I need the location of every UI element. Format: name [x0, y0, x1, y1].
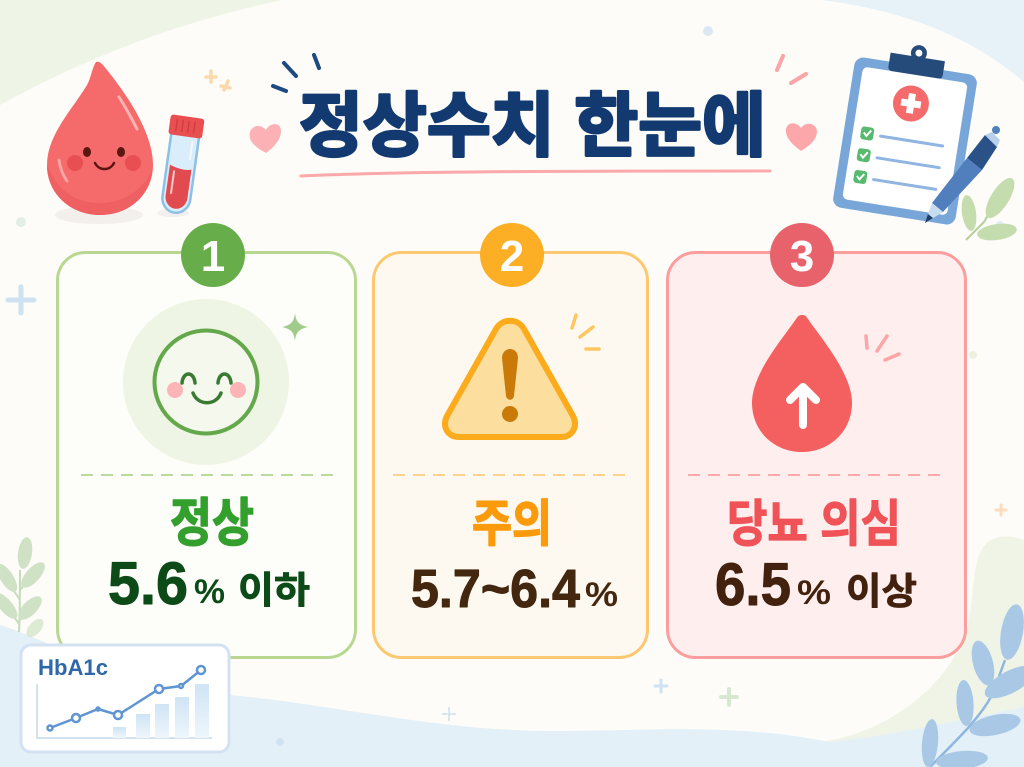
line series [48, 666, 205, 730]
icon: small orange sparkles [206, 71, 230, 90]
badge 3 [770, 223, 834, 287]
icon: pink accent lines [777, 56, 806, 83]
panel: normal card [58, 223, 356, 658]
panel: diabetes suspicion card [668, 223, 966, 658]
badge 3: 3 [790, 232, 814, 281]
value: 5.6% or below [108, 550, 310, 617]
background: top-right blue blob [822, 0, 1024, 82]
status label: normal: 정상 [170, 481, 254, 556]
value: 6.5% or above: 6.5 [715, 551, 791, 618]
title: 정상수치 한눈에 [299, 70, 766, 171]
status label: caution: 주의 [472, 484, 552, 556]
badge 2 [480, 223, 544, 287]
value: 5.6% or below: 이하 [238, 560, 310, 614]
value: 6.5% or above [715, 551, 917, 618]
badge 1 [181, 223, 245, 287]
bars [113, 684, 209, 738]
icon: left leaf sprig [0, 536, 49, 640]
icon: smiley face [123, 299, 289, 465]
background: bottom blue wave [0, 625, 1024, 767]
chart: HbA1c trend card [21, 645, 229, 752]
value: 5.6% or below: 5.6 [108, 550, 188, 617]
icon: clipboard leaf sprig [960, 174, 1020, 243]
title underline [301, 171, 770, 176]
icon: clipboard [832, 35, 1000, 226]
icon: navy accent lines [273, 55, 319, 91]
icon: left heart [250, 124, 281, 153]
icon: warning triangle [445, 321, 575, 437]
icon: test tube [157, 114, 205, 217]
icon: orange accent lines [572, 315, 599, 349]
value: 6.5% or above: % [797, 574, 831, 612]
badge 1: 1 [201, 232, 225, 281]
icon: right bottom leaf sprig [920, 603, 1024, 767]
panel: caution card [374, 223, 648, 658]
background: top-left green blob [0, 0, 282, 105]
icon: blood drop with up arrow [752, 315, 852, 452]
badge 2: 2 [500, 232, 524, 281]
value: 5.7 to 6.4%: % [585, 576, 618, 614]
icon: blood drop mascot [47, 62, 153, 224]
icon: red accent lines [866, 336, 899, 360]
background: lower-right green blob [820, 536, 1024, 745]
icon: right heart [786, 123, 817, 151]
value: 5.7 to 6.4%: 5.7~6.4 [411, 559, 580, 619]
chart title: HbA1c [38, 655, 108, 680]
status label: suspected diabetes: 당뇨 의심 [727, 484, 901, 556]
value: 6.5% or above: 이상 [846, 561, 917, 615]
value: 5.6% or below: % [194, 573, 225, 611]
icon: green sparkle [282, 313, 308, 341]
